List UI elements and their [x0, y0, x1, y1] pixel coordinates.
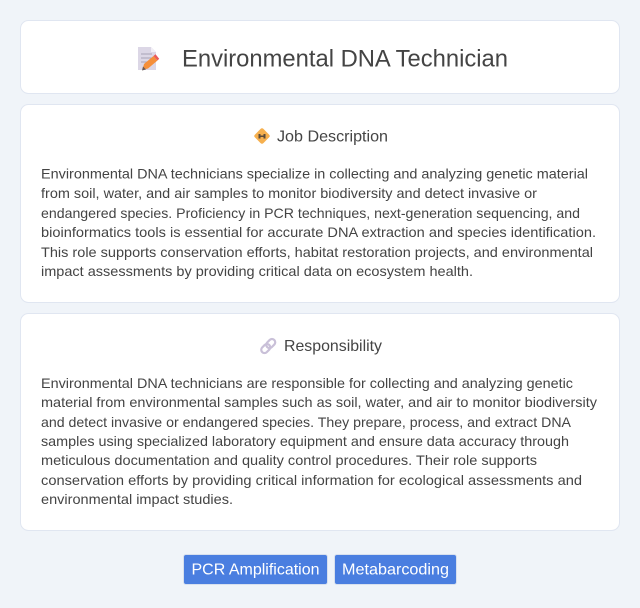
- text block: responsibility body: Environmental DNA technicians are responsible for collecting and analyzing genetic: [41, 375, 573, 391]
- text block: job description body: bioinformatics tools is essential for accurate DNA extraction and species identification.: [41, 224, 596, 240]
- icon: orange diamond: [254, 128, 270, 144]
- text block: job description body: [41, 166, 596, 279]
- icon: chain link: [260, 338, 277, 354]
- text block: job description body: from soil, water, and air samples to monitor biodiversity and detect invasive or: [41, 185, 537, 201]
- text block: responsibility body: and detect invasive or endangered species. They prepare, process, and extract DNA: [41, 414, 572, 430]
- tag: PCR Amplification: PCR Amplification: [192, 562, 320, 578]
- tag: PCR Amplification: [184, 554, 328, 584]
- text block: responsibility body: conservation efforts by providing critical information for ecological assessments and: [41, 472, 582, 488]
- heading: Responsibility: Responsibility: [284, 338, 382, 355]
- text block: responsibility body: [41, 375, 597, 507]
- heading: Environmental DNA Technician: Environmental DNA Technician: [182, 46, 508, 72]
- text block: responsibility body: meticulous documentation and quality control procedures. Their role supports: [41, 452, 537, 468]
- text block: responsibility body: samples using specialized laboratory equipment and ensure data accuracy through: [41, 433, 569, 449]
- heading: Job Description: Job Description: [277, 128, 388, 146]
- text block: responsibility body: environmental impact studies.: [41, 491, 233, 507]
- panel: title: [20, 20, 620, 94]
- tag: Metabarcoding: Metabarcoding: [342, 562, 449, 578]
- text block: job description body: This role supports conservation efforts, habitat restoration projects, and environmental: [41, 244, 593, 260]
- icon: memo with pencil: [138, 47, 159, 70]
- panel: responsibility: [20, 314, 620, 530]
- text block: job description body: impact assessments by providing critical data on ecosystem health.: [41, 263, 473, 279]
- text block: job description body: endangered species. Proficiency in PCR techniques, next-generation sequencing, and: [41, 205, 580, 221]
- text block: responsibility body: material from environmental samples such as soil, water, and air to monitor biodiversity: [41, 394, 597, 410]
- tag: Metabarcoding: [334, 554, 456, 584]
- text block: job description body: Environmental DNA technicians specialize in collecting and analyzing genetic material: [41, 166, 588, 182]
- panel: job description: [20, 104, 620, 302]
